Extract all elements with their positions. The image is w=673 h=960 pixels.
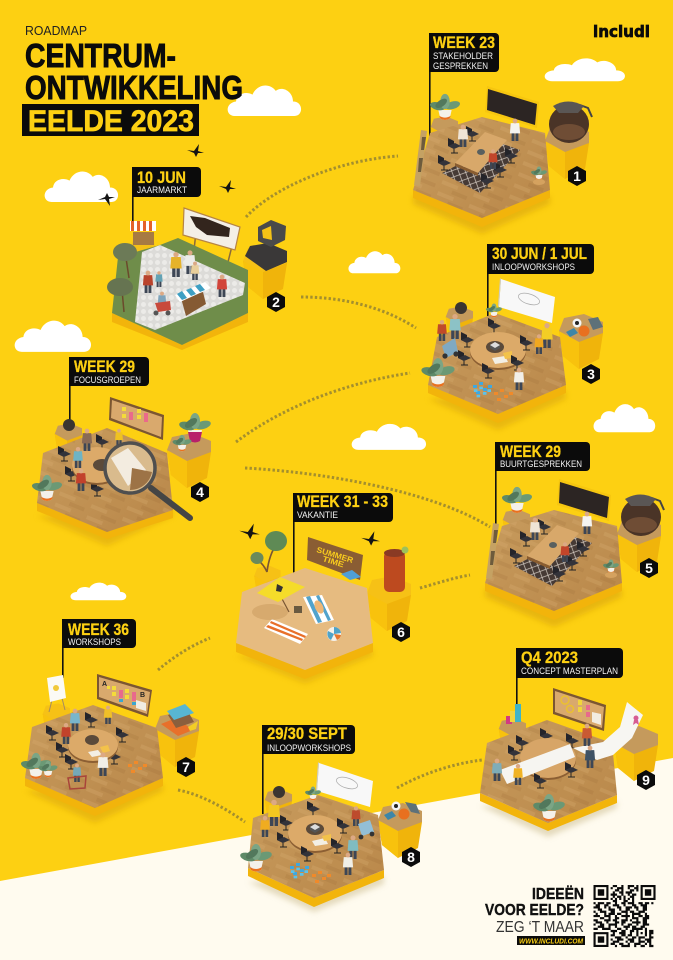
flag label 1: WEEK 23 (433, 34, 495, 52)
palm trees (250, 531, 287, 572)
visitors (143, 250, 227, 316)
badge 9: 9 (642, 772, 650, 788)
round table with chairs (58, 434, 122, 496)
flag label 2: 10 JUN (137, 169, 186, 187)
plants (20, 753, 58, 779)
room base (428, 306, 603, 430)
badge 7: 7 (182, 759, 190, 775)
badge 9 (637, 770, 655, 790)
flag pole (132, 190, 134, 226)
flag label 2: JAARMARKT (137, 185, 187, 195)
badge 2: 2 (272, 294, 280, 310)
magnifying glass (105, 443, 190, 518)
room scene (485, 479, 664, 627)
badge 4 (191, 482, 209, 502)
plants and pot (239, 786, 321, 872)
flag label 1: GESPREKKEN (433, 61, 488, 71)
flag pole (429, 60, 431, 136)
birds (98, 144, 380, 546)
cork board (109, 397, 164, 440)
badge 6 (392, 622, 410, 642)
hexagon base (112, 313, 248, 350)
people (61, 706, 112, 789)
unrolled paper (500, 702, 643, 784)
QR code (594, 885, 656, 947)
hexagon base (25, 705, 163, 823)
flip chart (47, 675, 66, 712)
panel 6: vakantie (236, 493, 411, 684)
badge 1 (568, 166, 586, 186)
flag label 3: INLOOPWORKSHOPS (492, 262, 575, 272)
title block (22, 23, 243, 138)
umbrella (252, 577, 305, 620)
sticky notes (290, 863, 331, 883)
panel 5: buurtgesprekken (485, 442, 664, 627)
plants (420, 302, 502, 387)
people (73, 429, 123, 491)
flag label 5: WEEK 29 (500, 443, 561, 461)
flag label 7 (62, 619, 136, 648)
flag label 9: Q4 2023 (521, 649, 578, 667)
towels, ball (264, 595, 341, 644)
badge 2 (267, 292, 285, 312)
badge 8 (402, 847, 420, 867)
panel 2: jaarmarkt (107, 190, 287, 350)
cork board (553, 688, 606, 731)
pedestal items (384, 802, 420, 820)
cream footer area (0, 758, 673, 960)
panel 4: focusgroepen (31, 357, 212, 546)
call to action text: IDEEËN (532, 885, 584, 903)
main title line 1: CENTRUM- (25, 37, 176, 74)
flag label 4 (69, 357, 149, 386)
people (437, 314, 553, 390)
pedestal items (566, 317, 603, 337)
overline: ROADMAP (25, 23, 87, 38)
panel 1: stakeholder gesprekken (413, 33, 592, 234)
panel 7: workshops (20, 619, 199, 823)
people (260, 800, 374, 875)
round table with chairs (458, 318, 533, 378)
badge 3 (582, 364, 600, 384)
panel 9: concept masterplan (480, 648, 658, 837)
badge 6: 6 (397, 624, 405, 640)
flag label 4: WEEK 29 (74, 358, 135, 376)
flag pole (487, 268, 489, 316)
flag pole (516, 670, 518, 704)
flag label 6 (293, 493, 393, 522)
sticky notes (128, 761, 147, 773)
badge 7 (177, 757, 195, 777)
main title line 2: ONTWIKKELING (25, 69, 243, 106)
pedestals (254, 566, 411, 631)
sticky notes (473, 382, 513, 401)
flag label 9: CONCEPT MASTERPLAN (521, 666, 618, 676)
whiteboard (316, 762, 373, 807)
flag label 5 (495, 442, 590, 471)
flag label 6: VAKANTIE (297, 510, 338, 520)
hexagon base (480, 720, 617, 837)
badge 8: 8 (407, 849, 415, 865)
round table with chairs (508, 728, 579, 788)
call to action text (485, 885, 585, 946)
flag pole (293, 516, 295, 573)
market stall (175, 282, 211, 316)
bar sculpture (506, 704, 521, 724)
summer sign: SUMMER (315, 545, 355, 565)
summer sign (307, 537, 363, 580)
flag pole (69, 380, 71, 422)
badge 4: 4 (196, 484, 204, 500)
whiteboard (498, 278, 555, 323)
paving (135, 245, 245, 330)
flag pole (495, 465, 497, 525)
hexagon base (37, 428, 173, 546)
trees (107, 243, 137, 312)
flag label 8 (262, 725, 355, 754)
flag label 3: 30 JUN / 1 JUL (492, 245, 587, 263)
website tag: WWW.INCLUDI.COM (519, 936, 584, 946)
flag label 6: WEEK 31 - 33 (297, 493, 388, 511)
badge 5: 5 (645, 560, 653, 576)
plants (31, 413, 212, 501)
pedestal with logo (243, 220, 287, 299)
flag label 8: 29/30 SEPT (267, 725, 347, 743)
flag pole (262, 748, 264, 814)
flag label 1 (429, 33, 499, 72)
flag label 8: INLOOPWORKSHOPS (267, 743, 351, 753)
cork board (97, 674, 152, 717)
panel 3: inloopworkshops (420, 244, 603, 430)
sand hexagon (236, 568, 373, 684)
dotted route lines (158, 156, 490, 822)
flag label 5: BUURTGESPREKKEN (500, 459, 582, 469)
logo: includi (593, 22, 650, 41)
call to action text: VOOR EELDE? (485, 902, 584, 919)
pedestals (43, 703, 199, 767)
summer sign: TIME (321, 554, 346, 570)
flag label 7: WORKSHOPS (68, 637, 121, 647)
plant (532, 794, 566, 822)
cork board: A (102, 681, 107, 688)
pedestals (55, 423, 211, 488)
hexagon base (248, 795, 384, 912)
badge 5 (640, 558, 658, 578)
cork board: B (140, 692, 145, 699)
clouds (15, 58, 655, 600)
pedestals (499, 718, 658, 781)
flag pole (62, 640, 64, 678)
room scene (413, 86, 592, 234)
badge 1: 1 (573, 168, 581, 184)
stacked boxes (161, 704, 198, 736)
flag label 9 (516, 648, 623, 678)
flag label 3 (487, 244, 594, 274)
flag label 4: FOCUSGROEPEN (74, 375, 141, 385)
flag label 2 (132, 167, 201, 197)
call to action text: ZEG ‘T MAAR (496, 919, 584, 936)
flag label 7: WEEK 36 (68, 621, 129, 639)
title highlight box: EELDE 2023 (28, 105, 194, 138)
round table with chairs (46, 712, 129, 769)
panel 8: inloopworkshops (239, 725, 422, 912)
round table with chairs (277, 801, 350, 861)
pedestals (265, 789, 422, 858)
people (492, 724, 595, 785)
badge 3: 3 (587, 366, 595, 382)
flag label 1: STAKEHOLDER (433, 51, 493, 61)
map billboard (183, 208, 240, 262)
drink glass (384, 546, 408, 592)
stall on small pedestal (130, 221, 156, 269)
